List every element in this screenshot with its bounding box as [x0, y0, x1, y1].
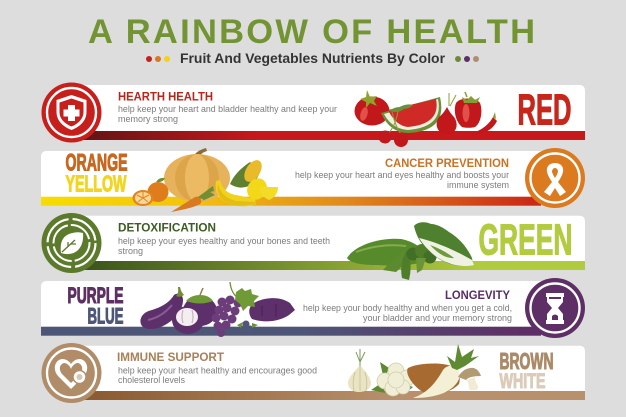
body text: help keep your body healthy and when you get a cold, [303, 302, 512, 313]
body text: help keep your heart and eyes healthy and boosts your [295, 169, 509, 180]
panel: green detoxification [42, 213, 585, 280]
icon: hourglass [525, 278, 585, 338]
green vegetables [347, 222, 474, 280]
label: RED: RED [518, 86, 572, 134]
heading: longevity: LONGEVITY [445, 288, 510, 302]
label: BROWN WHITE: WHITE [500, 369, 546, 393]
panel: purple blue longevity [41, 278, 585, 338]
label: BROWN WHITE: BROWN [500, 348, 554, 374]
subtitle: Fruit And Vegetables Nutrients By Color [180, 51, 446, 66]
label: PURPLE BLUE [68, 283, 124, 328]
panel: red heart health [42, 82, 585, 147]
body text: help keep your heart and bladder healthy and keep your [118, 103, 337, 114]
body text: help keep your heart healthy and encourages good [118, 365, 317, 376]
panel: brown white immune support [42, 343, 585, 403]
label: ORANGE YELLOW: ORANGE [66, 150, 128, 176]
title: A RAINBOW OF HEALTH [88, 13, 535, 51]
body text: strong [118, 245, 143, 256]
icon: shield [42, 82, 102, 142]
panel: orange yellow cancer prevention [41, 148, 585, 212]
left colour dots [146, 56, 170, 62]
icon: leaf recycle [42, 213, 102, 273]
icon: heart [42, 343, 102, 403]
body text: help keep your eyes healthy and your bones and teeth [118, 235, 330, 246]
label: BROWN WHITE [500, 348, 554, 393]
heading: immune support: IMMUNE SUPPORT [117, 350, 225, 364]
heading: cancer prevention: CANCER PREVENTION [385, 156, 509, 170]
label: PURPLE BLUE: PURPLE [68, 283, 124, 308]
orange and yellow fruit and vegetables [132, 148, 278, 212]
icon: ribbon [525, 148, 585, 208]
red fruit and vegetables [354, 90, 497, 147]
body text: cholesterol levels [118, 374, 185, 385]
heading: hearth health: HEARTH HEALTH [118, 90, 213, 104]
label: ORANGE YELLOW [66, 150, 128, 196]
right colour dots [455, 56, 479, 62]
label: PURPLE BLUE: BLUE [88, 304, 124, 328]
label: ORANGE YELLOW: YELLOW [66, 170, 127, 196]
brown and white vegetables [348, 344, 481, 398]
body text: memory strong [118, 113, 178, 124]
heading: detoxification: DETOXIFICATION [118, 221, 216, 235]
purple fruit and vegetables [140, 282, 295, 337]
body text: your bladder and your memory strong [363, 312, 512, 323]
body text: immune system [447, 179, 509, 190]
